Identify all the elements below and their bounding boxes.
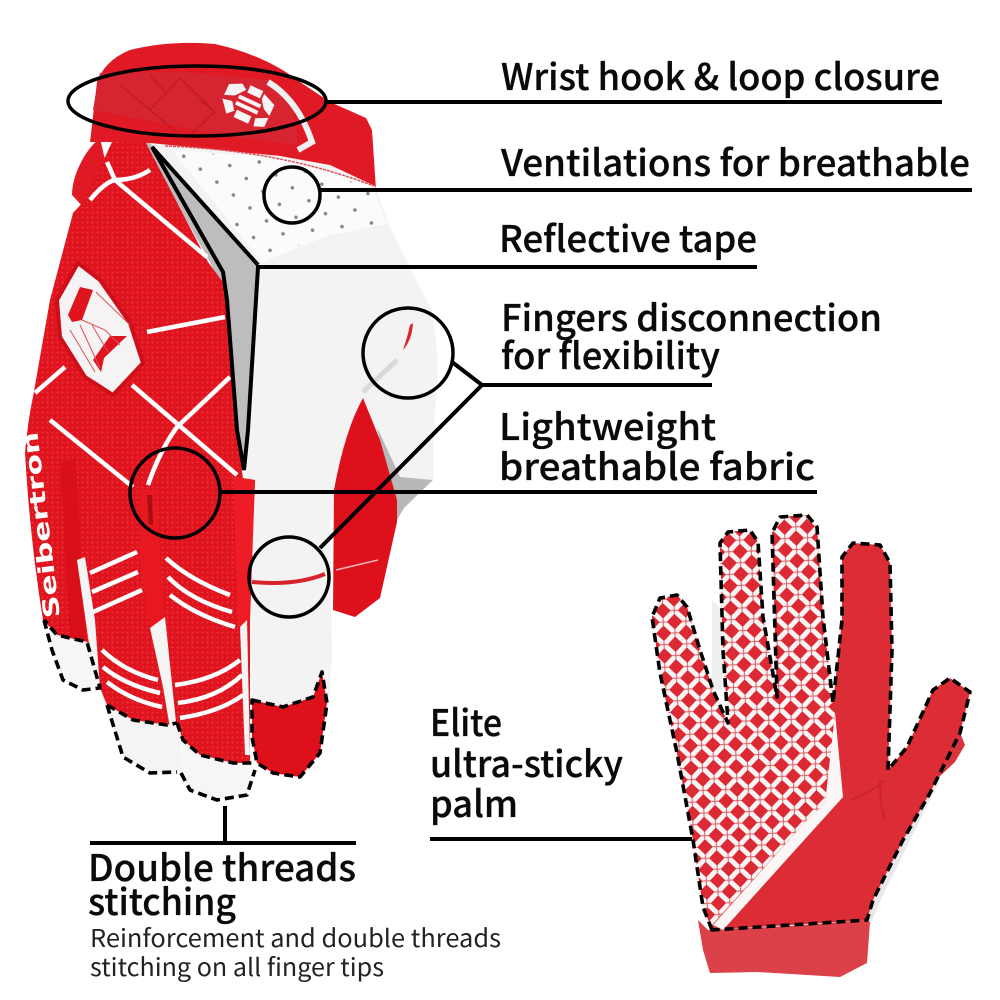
diamond grip pattern: [652, 515, 835, 925]
white tip ring: [107, 705, 183, 773]
callout: sticky palm: Elite: [430, 694, 502, 747]
red thumb: [333, 398, 397, 617]
wrist strap: [93, 72, 298, 145]
callout: double threads: stitching on all finger tips: [90, 949, 384, 984]
callout: reflective tape: [152, 147, 757, 470]
strap diamond embossing: [120, 75, 215, 135]
callout: ventilations: [264, 134, 972, 223]
right glove: palm view: [652, 515, 970, 977]
white tip pinky: [43, 620, 100, 690]
red seam band on finger: [252, 574, 325, 583]
strap logo: [217, 77, 278, 131]
finger side strip: [233, 477, 255, 628]
white tip middle: [180, 740, 255, 800]
dashed palm outline: [652, 515, 970, 930]
finger gap middle: [140, 490, 165, 628]
callout: wrist closure: Wrist hook & loop closure: [501, 48, 940, 101]
grey thumb insert: [377, 427, 433, 520]
callout: double threads: Reinforcement and double threads: [90, 920, 501, 955]
perforated panel: [172, 150, 388, 262]
callout: lightweight fabric: Lightweight: [499, 398, 716, 451]
callout: ventilations: Ventilations for breathable: [500, 134, 970, 187]
wrist cuff body: [90, 43, 376, 190]
palm base shape: [652, 515, 970, 930]
left side tab: [72, 138, 105, 208]
middle finger white: [250, 480, 330, 705]
stitched red seam: [165, 146, 374, 186]
white finger strips: [77, 557, 250, 760]
red mesh back: [25, 142, 255, 763]
cuff: [698, 920, 870, 977]
white diagonal strip: [713, 713, 843, 930]
brand text: Seibertron: [18, 431, 66, 619]
callout: double threads: [88, 806, 501, 984]
callout: sticky palm: [430, 694, 692, 839]
thumb highlight: [336, 560, 378, 570]
thumb crease: [850, 780, 885, 820]
callout: reflective tape: Reflective tape: [499, 210, 757, 263]
dashed finger tip outlines: [44, 620, 327, 800]
callout: sticky palm: ultra-sticky: [430, 735, 623, 788]
callout: lightweight fabric: breathable fabric: [499, 438, 815, 491]
thumb back: [930, 720, 965, 780]
callout: fingers disconnection: [249, 289, 882, 617]
grey reflective tape: [143, 143, 258, 470]
callout: fingers disconnection: for flexibility: [501, 327, 720, 380]
callout: sticky palm: palm: [430, 775, 518, 828]
white palm panel: [150, 143, 438, 705]
ventilation perforations: [172, 150, 385, 258]
callout: double threads: stitching: [88, 873, 236, 926]
white backing: [860, 780, 940, 925]
strap loop edge: [268, 82, 312, 150]
left glove: back of hand view: [18, 43, 438, 800]
finger gap shadow: [60, 458, 85, 640]
red finger tip: [252, 672, 327, 777]
big logo patch: [57, 263, 143, 395]
callout: lightweight fabric: [130, 398, 817, 538]
white mesh lines: [35, 162, 243, 718]
callout: fingers disconnection: Fingers disconnection: [501, 289, 882, 342]
callout: wrist closure: [68, 48, 942, 136]
white between fingers: [712, 600, 722, 690]
finger crease: [403, 323, 413, 350]
callout: double threads: Double threads: [88, 839, 356, 892]
